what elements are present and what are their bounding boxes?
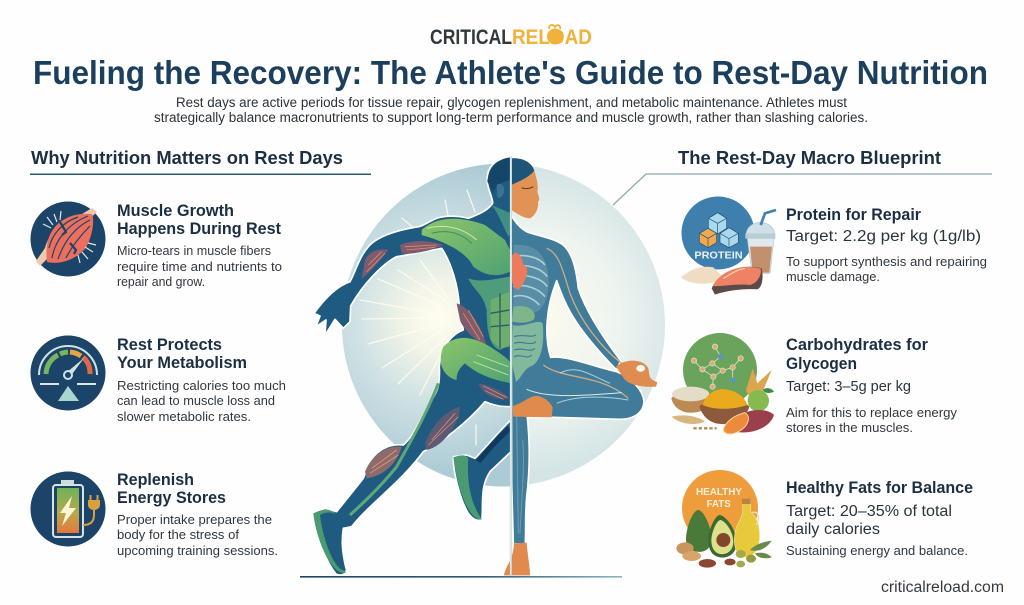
item: protein — [681, 196, 987, 295]
heading — [117, 201, 281, 238]
left section heading: Why Nutrition Matters on Rest Days — [31, 148, 343, 168]
heading: Happens During Rest — [117, 219, 281, 238]
heading: Healthy Fats for Balance — [786, 478, 973, 497]
heading: Energy Stores — [117, 488, 226, 507]
title: Fueling the Recovery: The Athlete's Guide to Rest-Day Nutrition — [33, 54, 988, 91]
target: daily calories — [786, 521, 880, 538]
heading — [117, 335, 247, 372]
description: Proper intake prepares the — [117, 513, 272, 527]
description: require time and nutrients to — [117, 260, 282, 274]
centre divider — [510, 157, 512, 575]
icon: protein cubes, shake and salmon: PROTEIN — [694, 251, 743, 262]
description — [786, 255, 987, 284]
item: energy stores — [30, 470, 278, 558]
description: To support synthesis and repairing — [786, 255, 987, 269]
item: carbohydrates — [671, 333, 958, 435]
heading: Muscle Growth — [117, 201, 234, 220]
right half: meditating body — [504, 158, 657, 575]
description: muscle damage. — [786, 270, 880, 284]
background disc — [342, 164, 665, 486]
heading: Carbohydrates for — [786, 335, 928, 354]
target: Target: 3–5g per kg — [786, 379, 911, 395]
target — [786, 503, 952, 538]
icon: avocado, oil and nuts: HEALTHY — [696, 487, 743, 498]
right section heading — [613, 148, 992, 205]
icon: protein cubes, shake and salmon — [681, 196, 776, 295]
logo: RELOAD — [512, 26, 592, 49]
website footer: criticalreload.com — [881, 579, 1004, 596]
description: Micro-tears in muscle fibers — [117, 244, 271, 258]
intro text: strategically balance macronutrients to support long-term performance and muscle growth, rather than slashing calories. — [154, 110, 868, 125]
left half: runner body — [313, 157, 511, 575]
floor line — [300, 576, 622, 578]
description — [117, 513, 278, 558]
icon: metabolism gauge — [30, 336, 106, 410]
right section heading: The Rest-Day Macro Blueprint — [678, 148, 941, 168]
description: Aim for this to replace energy — [786, 406, 958, 420]
heading: Replenish — [117, 470, 194, 489]
logo: CRITICAL — [430, 26, 512, 49]
heading: Rest Protects — [117, 335, 222, 354]
description: Restricting calories too much — [117, 379, 286, 393]
heading — [786, 335, 928, 373]
left half: back leg — [453, 420, 511, 520]
description — [117, 379, 286, 424]
logo — [430, 25, 592, 49]
item: metabolism — [30, 335, 286, 424]
icon: torn muscle — [30, 202, 106, 276]
icon: avocado, oil and nuts — [676, 470, 772, 568]
icon: avocado, oil and nuts: FATS — [707, 499, 731, 510]
description: slower metabolic rates. — [117, 410, 251, 424]
heading: Protein for Repair — [786, 205, 921, 224]
icon: battery and plug — [30, 472, 106, 546]
description: repair and grow. — [117, 275, 205, 289]
description: can lead to muscle loss and — [117, 394, 275, 408]
icon: carbohydrate foods — [671, 333, 774, 434]
target: Target: 2.2g per kg (1g/lb) — [786, 228, 981, 245]
item: healthy fats — [676, 470, 973, 568]
description: body for the stress of — [117, 528, 240, 542]
description — [117, 244, 282, 289]
description: stores in the muscles. — [786, 421, 913, 435]
heading: Your Metabolism — [117, 353, 247, 372]
heading — [117, 470, 226, 507]
intro text: Rest days are active periods for tissue repair, glycogen replenishment, and metabolic maintenance. Athletes must — [176, 95, 847, 110]
description: Sustaining energy and balance. — [786, 544, 968, 558]
heading: Glycogen — [786, 354, 857, 373]
item: muscle growth — [30, 201, 282, 289]
description: upcoming training sessions. — [117, 544, 278, 558]
intro text — [154, 95, 868, 125]
description — [786, 406, 958, 435]
target: Target: 20–35% of total — [786, 503, 952, 520]
central figure: runner and meditating anatomy — [300, 157, 665, 578]
